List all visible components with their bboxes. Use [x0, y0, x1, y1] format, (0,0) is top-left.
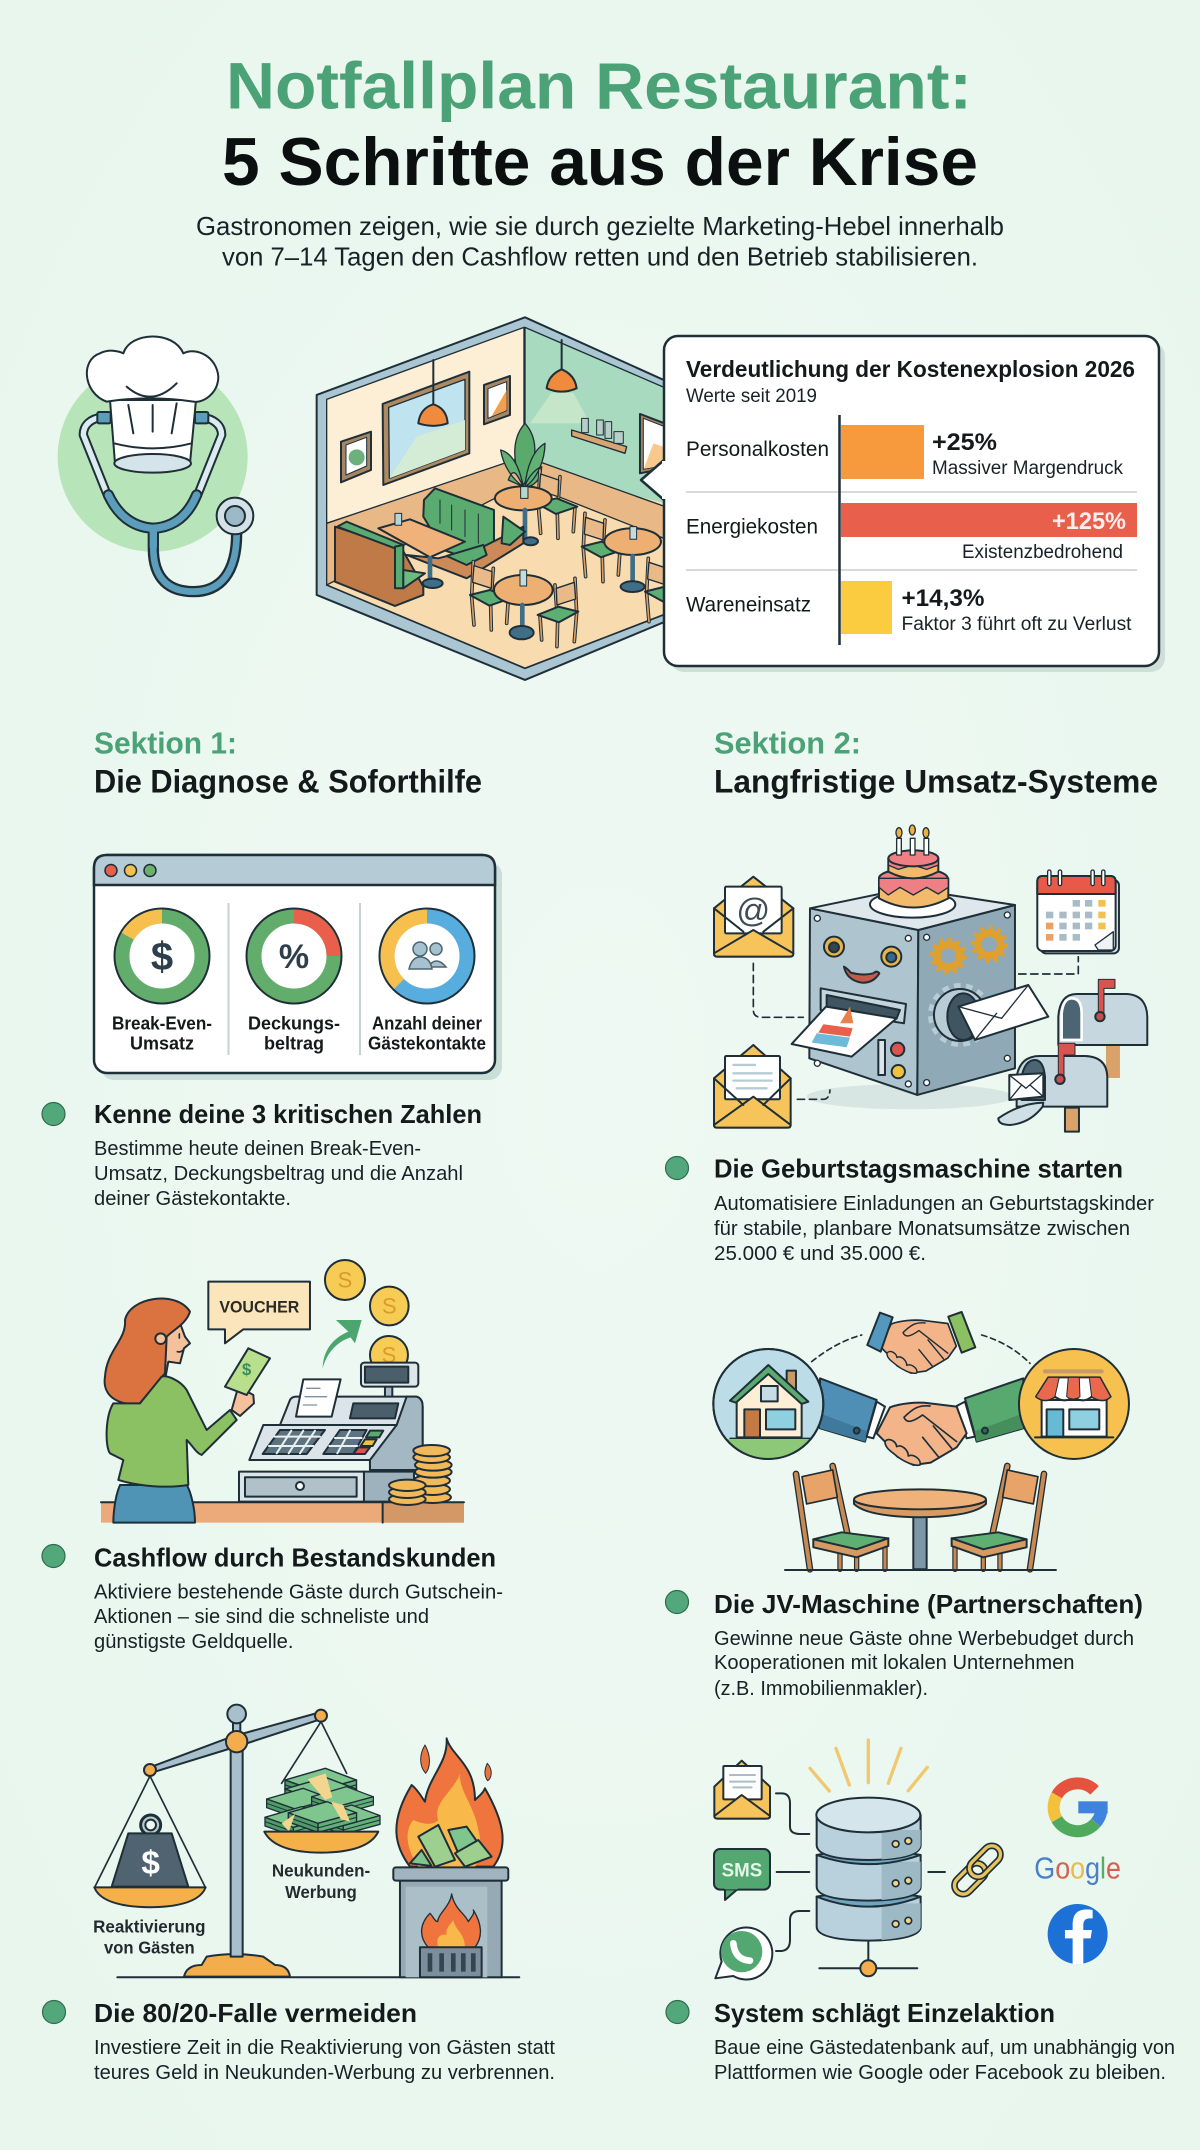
step: Die Geburtstagsmaschine starten	[666, 1154, 1154, 1265]
chart heading: Werte seit 2019	[686, 386, 817, 407]
illustration: woman at cash register with voucher: S	[382, 1294, 397, 1319]
illustration: scale and burning money: $	[141, 1845, 160, 1882]
title: Notfallplan Restaurant:	[226, 48, 972, 122]
donut: Break-Even-Umsatz: $	[151, 935, 173, 979]
illustration: woman at cash register with voucher: S	[382, 1343, 396, 1368]
illustration: scale and burning money: Neukunden-	[272, 1861, 370, 1881]
donut: Deckungsbeitrag: %	[279, 938, 309, 976]
heading: Sektion 2: Langfristige Umsatz-Systeme	[714, 764, 1158, 800]
illustration: birthday machine: @	[736, 893, 770, 930]
illustration: guest database and platforms: SMS	[722, 1861, 762, 1882]
step: Die JV-Maschine	[666, 1589, 1143, 1700]
step: Die JV-Maschine: Gewinne neue Gäste ohne Werbebudget durch	[714, 1628, 1134, 1650]
illustration: guest database and platforms	[714, 1740, 1121, 1979]
row: Personalkosten: Massiver Margendruck	[932, 458, 1123, 479]
donut: Gästekontakte	[368, 916, 486, 1054]
donut: Deckungsbeitrag: Deckungs-	[248, 1014, 340, 1034]
step: Die 80/20-Falle vermeiden	[42, 1998, 555, 2084]
donut: Gästekontakte: Anzahl deiner	[372, 1014, 482, 1034]
heading: Sektion 1	[94, 726, 482, 800]
step: Kenne deine 3 kritischen Zahlen: Kenne deine 3 kritischen Zahlen	[94, 1099, 482, 1129]
illustration: scale and burning money: Reaktivierung	[93, 1917, 205, 1937]
donut: Break-Even-Umsatz: Break-Even-	[112, 1014, 212, 1034]
row: Personalkosten	[686, 425, 1123, 479]
step: Cashflow durch Bestandskunden: günstigste Geldquelle.	[94, 1631, 294, 1653]
illustration: woman at cash register with voucher: VOUCHER	[219, 1298, 299, 1317]
title: 5 Schritte aus der Krise	[222, 124, 978, 200]
chart heading: Verdeutlichung der Kostenexplosion 2026	[686, 356, 1135, 382]
row: Personalkosten: Personalkosten	[686, 438, 829, 461]
step: Die 80/20-Falle vermeiden: Die 80/20-Falle vermeiden	[94, 1998, 417, 2028]
step: Cashflow durch Bestandskunden: Aktiviere bestehende Gäste durch Gutschein-	[94, 1582, 503, 1604]
step: Die Geburtstagsmaschine starten: Automatisiere Einladungen an Geburtstagskinder	[714, 1193, 1154, 1215]
step: Die JV-Maschine: Die JV-Maschine (Partnerschaften)	[714, 1589, 1143, 1619]
subtitle: von 7–14 Tagen den Cashflow retten und den Betrieb stabilisieren.	[222, 242, 978, 272]
row: Wareneinsatz: Wareneinsatz	[686, 594, 811, 616]
heading: Sektion 2: Sektion 2:	[714, 726, 861, 760]
heading: Sektion 1: Sektion 1:	[94, 726, 237, 760]
row: Personalkosten: +25%	[932, 429, 997, 456]
restaurant interior illustration	[317, 317, 693, 680]
donut: Deckungsbeitrag: beltrag	[264, 1034, 324, 1054]
donut: Deckungsbeitrag	[248, 916, 340, 1054]
subtitle	[196, 211, 1004, 272]
heading: Sektion 1: Die Diagnose & Soforthilfe	[94, 764, 482, 800]
step: Die 80/20-Falle vermeiden: Investiere Zeit in die Reaktivierung von Gästen statt	[94, 2037, 555, 2059]
illustration: woman at cash register with voucher: S	[338, 1268, 352, 1293]
step: Die Geburtstagsmaschine starten: 25.000 € und 35.000 €.	[714, 1243, 926, 1265]
illustration: scale and burning money	[93, 1705, 519, 1977]
illustration: woman at cash register with voucher: $	[242, 1360, 252, 1379]
icon: stethoscope with chef hat	[58, 336, 253, 592]
step: Die JV-Maschine: (z.B. Immobilienmakler).	[714, 1678, 928, 1700]
step: Kenne deine 3 kritischen Zahlen: Bestimme heute deinen Break-Even-	[94, 1138, 421, 1160]
step: Die Geburtstagsmaschine starten: für stabile, planbare Monatsumsätze zwischen	[714, 1218, 1130, 1240]
illustration: guest database and platforms: Google	[1034, 1851, 1121, 1885]
step: Kenne deine 3 kritischen Zahlen	[42, 1099, 482, 1210]
illustration: scale and burning money: Werbung	[285, 1882, 357, 1902]
step: System schlägt Einzelaktion: Baue eine Gästedatenbank auf, um unabhängig von	[714, 2037, 1175, 2059]
illustration: handshake partnership	[713, 1312, 1129, 1570]
step: Kenne deine 3 kritischen Zahlen: deiner Gästekontakte.	[94, 1188, 291, 1210]
illustration: birthday machine	[714, 825, 1147, 1132]
panel: browser window with 3 KPI donuts	[94, 855, 502, 1080]
step: Die JV-Maschine: Kooperationen mit lokalen Unternehmen	[714, 1652, 1074, 1674]
step: Die Geburtstagsmaschine starten: Die Geburtstagsmaschine starten	[714, 1154, 1123, 1184]
row: Wareneinsatz: Faktor 3 führt oft zu Verlust	[902, 614, 1132, 635]
row: Energiekosten: +125%	[1052, 508, 1126, 535]
step: Cashflow durch Bestandskunden: Aktionen – sie sind die schneliste und	[94, 1606, 429, 1628]
illustration: scale and burning money: von Gästen	[104, 1937, 195, 1957]
step: System schlägt Einzelaktion	[666, 1998, 1175, 2084]
donut: Gästekontakte: Gästekontakte	[368, 1034, 486, 1054]
row: Wareneinsatz: +14,3%	[902, 585, 984, 612]
row: Energiekosten: Existenzbedrohend	[962, 542, 1123, 563]
panel: cost explosion chart	[641, 336, 1165, 672]
step: Cashflow durch Bestandskunden	[42, 1542, 503, 1653]
title	[222, 48, 978, 200]
step: System schlägt Einzelaktion: System schlägt Einzelaktion	[714, 1998, 1055, 2028]
step: Die 80/20-Falle vermeiden: teures Geld in Neukunden-Werbung zu verbrennen.	[94, 2062, 555, 2084]
row: Energiekosten	[686, 503, 1137, 563]
donut: Break-Even-Umsatz: Umsatz	[130, 1034, 194, 1054]
row: Energiekosten: Energiekosten	[686, 516, 818, 538]
row: Wareneinsatz	[686, 581, 1132, 635]
donut: Break-Even-Umsatz	[112, 916, 212, 1054]
step: System schlägt Einzelaktion: Plattformen wie Google oder Facebook zu bleiben.	[714, 2062, 1166, 2084]
subtitle: Gastronomen zeigen, wie sie durch gezielte Marketing-Hebel innerhalb	[196, 211, 1004, 241]
heading: Sektion 2	[714, 726, 1158, 800]
illustration: woman at cash register with voucher	[101, 1260, 464, 1523]
chart heading	[686, 356, 1135, 407]
step: Kenne deine 3 kritischen Zahlen: Umsatz, Deckungsbeltrag und die Anzahl	[94, 1163, 463, 1185]
step: Cashflow durch Bestandskunden: Cashflow durch Bestandskunden	[94, 1542, 496, 1572]
